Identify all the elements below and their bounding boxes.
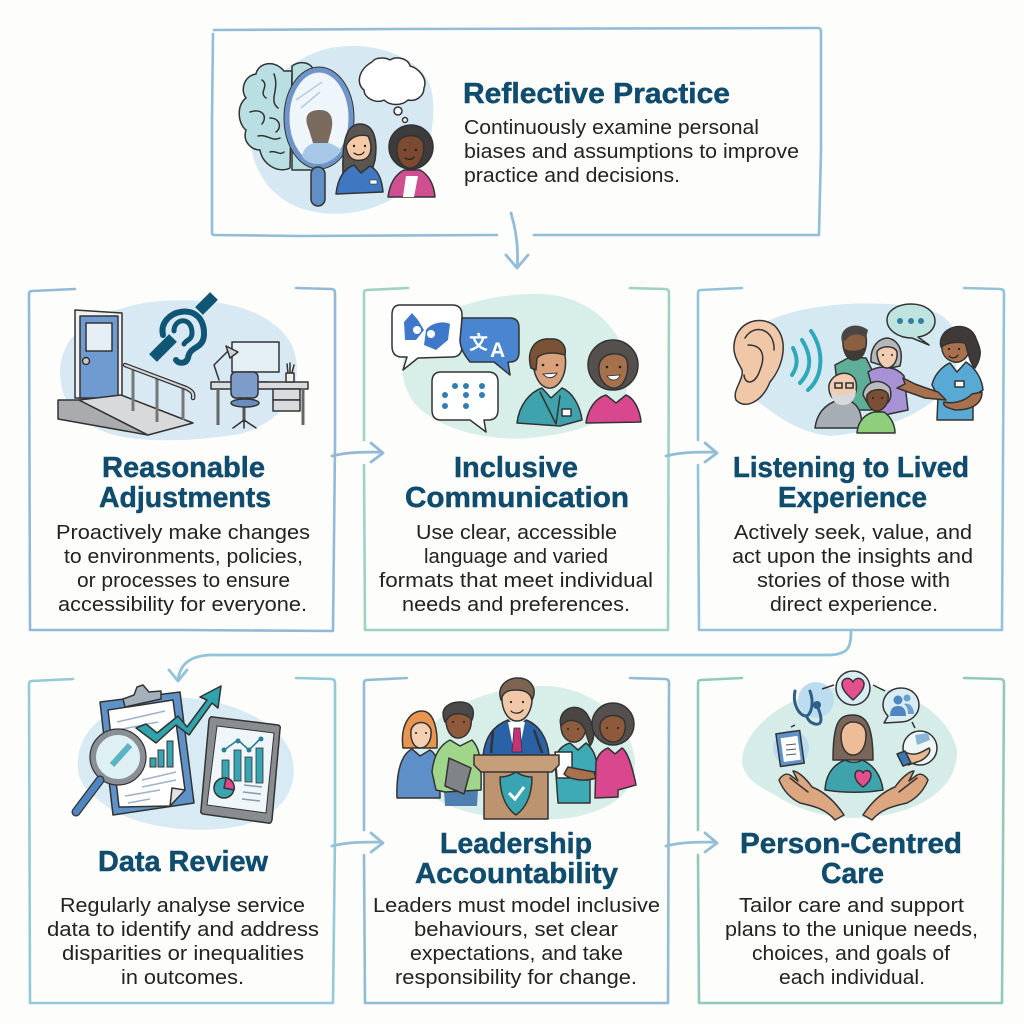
figure: older woman [868, 338, 908, 416]
description [732, 522, 973, 616]
speech bubble: sign language [392, 305, 462, 370]
speech bubble: translation: A [490, 339, 505, 362]
panel: Data Review [29, 678, 335, 1003]
arrow: communication to lived experience [666, 443, 717, 462]
description: expectations, and take [410, 943, 623, 965]
heading: Listening to Lived [733, 452, 969, 484]
description: stories of those with [757, 570, 950, 592]
description: in outcomes. [121, 967, 244, 989]
figure: nurse [897, 327, 983, 420]
description: practice and decisions. [464, 165, 680, 187]
speech bubble: translation: 文 [469, 331, 488, 354]
description: direct experience. [770, 594, 938, 616]
heading: Communication [405, 482, 629, 514]
icon: clipboard [773, 730, 809, 767]
heading [99, 452, 271, 514]
heading: Accountability [415, 858, 618, 890]
description: Tailor care and support [739, 895, 964, 917]
figure: central person [825, 715, 883, 792]
figure: woman in pink [592, 703, 636, 798]
description: disparities or inequalities [62, 943, 304, 965]
description: responsibility for change. [395, 967, 637, 989]
illustration: person surrounded by care icons [742, 671, 957, 820]
arrow: leadership to person-centred care [666, 833, 717, 852]
speech bubble: braille [432, 372, 498, 432]
description: biases and assumptions to improve [464, 141, 799, 163]
description: Continuously examine personal [464, 117, 759, 139]
illustration: leader at podium with team [397, 678, 636, 820]
heading [415, 828, 618, 890]
heading: Leadership [440, 828, 592, 860]
heading [733, 452, 969, 514]
description: Regularly analyse service [60, 895, 305, 917]
icon: open hands [779, 771, 928, 820]
description [373, 895, 660, 989]
icon: hearing loop symbol [153, 296, 214, 363]
panel: Inclusive Communication [364, 288, 669, 630]
panel: Person-Centred Care [698, 671, 1004, 1003]
heading: Experience [778, 482, 927, 514]
panel: Listening to Lived Experience [698, 288, 1004, 630]
description: Actively seek, value, and [734, 522, 972, 544]
figure: man with tablet [432, 702, 481, 806]
heading: Person-Centred [740, 828, 962, 860]
figure: man with beard [835, 326, 872, 410]
description: language and varied [424, 546, 608, 568]
heading: Reflective Practice [463, 78, 730, 110]
illustration: ear, sound waves, group and nurse [734, 303, 983, 436]
heading [740, 828, 962, 890]
description: data to identify and address [47, 919, 319, 941]
illustration: communication bubbles and two people [392, 294, 641, 439]
panel: Leadership Accountability [364, 678, 669, 1003]
figure: older man [815, 373, 862, 428]
description: needs and preferences. [402, 594, 630, 616]
arrow: reflective practice to row two [506, 213, 528, 268]
description: choices, and goals of [752, 943, 950, 965]
panel: Reasonable Adjustments [29, 288, 335, 631]
figure: woman with orange hair [397, 711, 440, 798]
description: Use clear, accessible [416, 522, 617, 544]
arrow: adjustments to communication [332, 443, 383, 462]
arrow: data review to leadership [332, 833, 383, 852]
description: act upon the insights and [732, 546, 973, 568]
arrow: connector to row three [169, 631, 851, 681]
figure: nurse with paper [555, 707, 597, 803]
description: formats that meet individual [379, 570, 653, 592]
illustration: brain, mirror and two people [239, 46, 435, 214]
icon: hand with pills [897, 731, 937, 766]
figure: leader [483, 678, 549, 756]
panel: Reflective Practice [212, 28, 821, 236]
description: or processes to ensure [77, 570, 290, 592]
description: each individual. [779, 967, 925, 989]
description: to environments, policies, [64, 546, 303, 568]
speech bubble: translation [460, 318, 519, 375]
description: plans to the unique needs, [725, 919, 978, 941]
description [379, 522, 653, 616]
description: Leaders must model inclusive [373, 895, 660, 917]
heading: Reasonable [102, 452, 265, 484]
heading: Inclusive [454, 452, 578, 484]
illustration: door, ramp, hearing symbol and desk [58, 296, 308, 440]
icon: stethoscope [794, 682, 834, 724]
heading: Care [821, 858, 884, 890]
heading [405, 452, 629, 514]
description [464, 117, 799, 187]
description [725, 895, 978, 989]
icon: heart circle [836, 671, 870, 705]
heading: Data Review [98, 846, 268, 878]
description: behaviours, set clear [414, 919, 618, 941]
podium [474, 755, 559, 819]
description: Proactively make changes [56, 522, 310, 544]
illustration: clipboard, magnifier and tablet [76, 685, 294, 830]
description [56, 522, 310, 616]
description: accessibility for everyone. [58, 594, 307, 616]
description [47, 895, 319, 989]
heading: Adjustments [99, 482, 271, 514]
figure: child [857, 382, 895, 433]
icon: people speech bubble [883, 688, 919, 723]
